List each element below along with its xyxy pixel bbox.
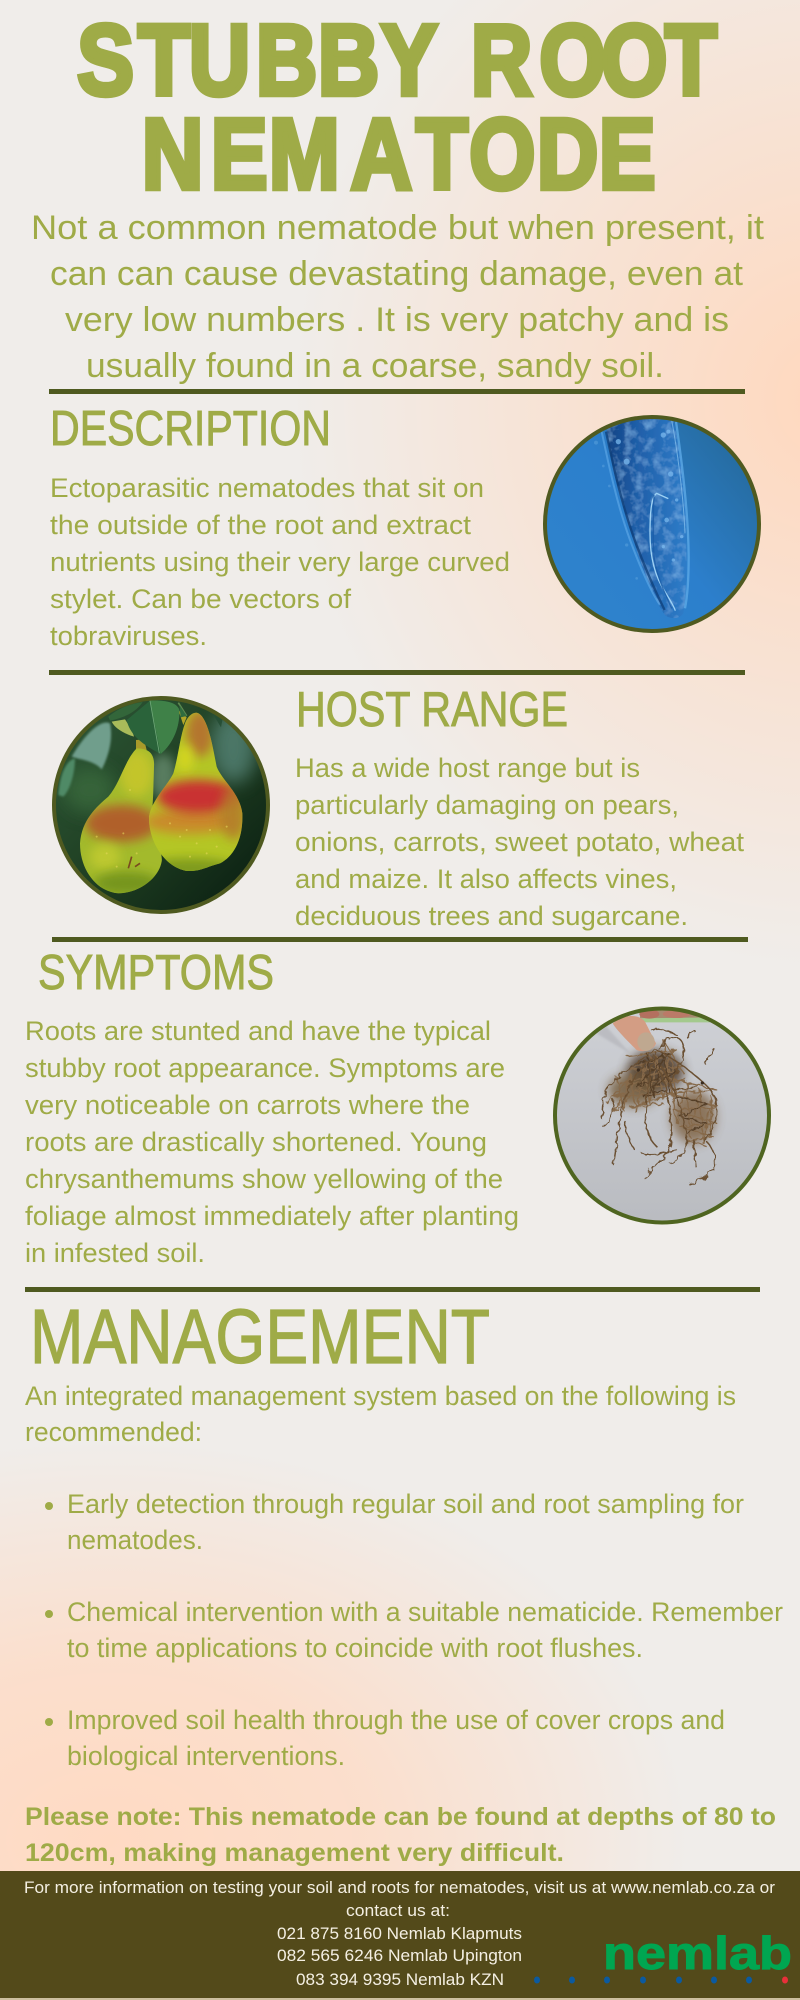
host range text: Has a wide host range but is <box>295 753 640 783</box>
bullet: early detection: nematodes. <box>67 1525 203 1555</box>
heading: host range: HOST RANGE <box>296 683 568 737</box>
bullet: early detection <box>45 1489 744 1555</box>
host range text: particularly damaging on pears, <box>295 790 679 820</box>
heading: description: DESCRIPTION <box>50 402 331 456</box>
footer contact text: 082 565 6246 Nemlab Upington <box>277 1946 522 1965</box>
image: nematode micrograph <box>540 412 764 636</box>
bullet: improved soil health: Improved soil health through the use of cover crops and <box>67 1705 725 1735</box>
description text: stylet. Can be vectors of <box>50 584 352 614</box>
host range text: deciduous trees and sugarcane. <box>295 901 688 931</box>
description text: Ectoparasitic nematodes that sit on <box>50 473 484 503</box>
title: STUBBY ROOT <box>77 4 717 116</box>
description text: tobraviruses. <box>50 621 207 651</box>
footer contact text: 083 394 9395 Nemlab KZN <box>296 1970 504 1989</box>
title <box>77 4 717 210</box>
symptoms text: chrysanthemums show yellowing of the <box>25 1164 503 1194</box>
description text: nutrients using their very large curved <box>50 547 510 577</box>
logo: nemlab <box>534 1927 792 1984</box>
bullet: improved soil health: biological interventions. <box>67 1741 345 1771</box>
symptoms text: in infested soil. <box>25 1238 205 1268</box>
bullet: early detection: Early detection through regular soil and root sampling for <box>67 1489 744 1519</box>
panel: host range <box>50 683 745 931</box>
heading: management: MANAGEMENT <box>30 1294 490 1380</box>
logo: nemlab: nemlab <box>603 1927 792 1979</box>
management intro text <box>25 1381 736 1447</box>
bullet: chemical intervention: Chemical intervention with a suitable nematicide. Remember <box>67 1597 783 1627</box>
image: two pears on a branch <box>50 694 274 918</box>
intro text: usually found in a coarse, sandy soil. <box>86 347 664 385</box>
intro text: very low numbers . It is very patchy and is <box>65 301 729 339</box>
symptoms text: roots are drastically shortened. Young <box>25 1127 487 1157</box>
title: NEMATODE <box>142 98 656 210</box>
footer contact text <box>24 1878 775 1989</box>
callout: please note: 120cm, making management very difficult. <box>25 1839 564 1867</box>
description text <box>50 473 510 651</box>
footer contact text: For more information on testing your soil and roots for nematodes, visit us at www.nemlab.co.za or <box>24 1878 775 1897</box>
symptoms text: foliage almost immediately after planting <box>25 1201 519 1231</box>
symptoms text: Roots are stunted and have the typical <box>25 1016 491 1046</box>
symptoms text: very noticeable on carrots where the <box>25 1090 470 1120</box>
description text: the outside of the root and extract <box>50 510 472 540</box>
symptoms text: stubby root appearance. Symptoms are <box>25 1053 505 1083</box>
bullet: chemical intervention <box>45 1597 783 1663</box>
bullet list <box>45 1489 783 1771</box>
heading: symptoms: SYMPTOMS <box>38 946 274 1000</box>
callout: please note: Please note: This nematode can be found at depths of 80 to <box>25 1803 776 1831</box>
callout: please note <box>25 1803 776 1867</box>
bullet: chemical intervention: to time applications to coincide with root flushes. <box>67 1633 643 1663</box>
management intro text: An integrated management system based on the following is <box>25 1381 736 1411</box>
footer contact text: contact us at: <box>346 1901 450 1920</box>
host range text <box>295 753 745 931</box>
symptoms text <box>25 1016 519 1268</box>
panel: symptoms <box>25 946 774 1268</box>
bullet: improved soil health <box>45 1705 725 1771</box>
image: stubby roots held by a finger <box>552 1005 774 1227</box>
intro text <box>31 209 765 385</box>
host range text: onions, carrots, sweet potato, wheat <box>295 827 745 857</box>
management intro text: recommended: <box>25 1417 202 1447</box>
footer contact text: 021 875 8160 Nemlab Klapmuts <box>277 1924 522 1943</box>
footer band <box>0 1871 800 2000</box>
intro text: Not a common nematode but when present, it <box>31 209 765 247</box>
host range text: and maize. It also affects vines, <box>295 864 677 894</box>
panel: description <box>50 402 764 651</box>
panel: management <box>25 1294 783 1867</box>
intro text: can can cause devastating damage, even at <box>50 255 744 293</box>
